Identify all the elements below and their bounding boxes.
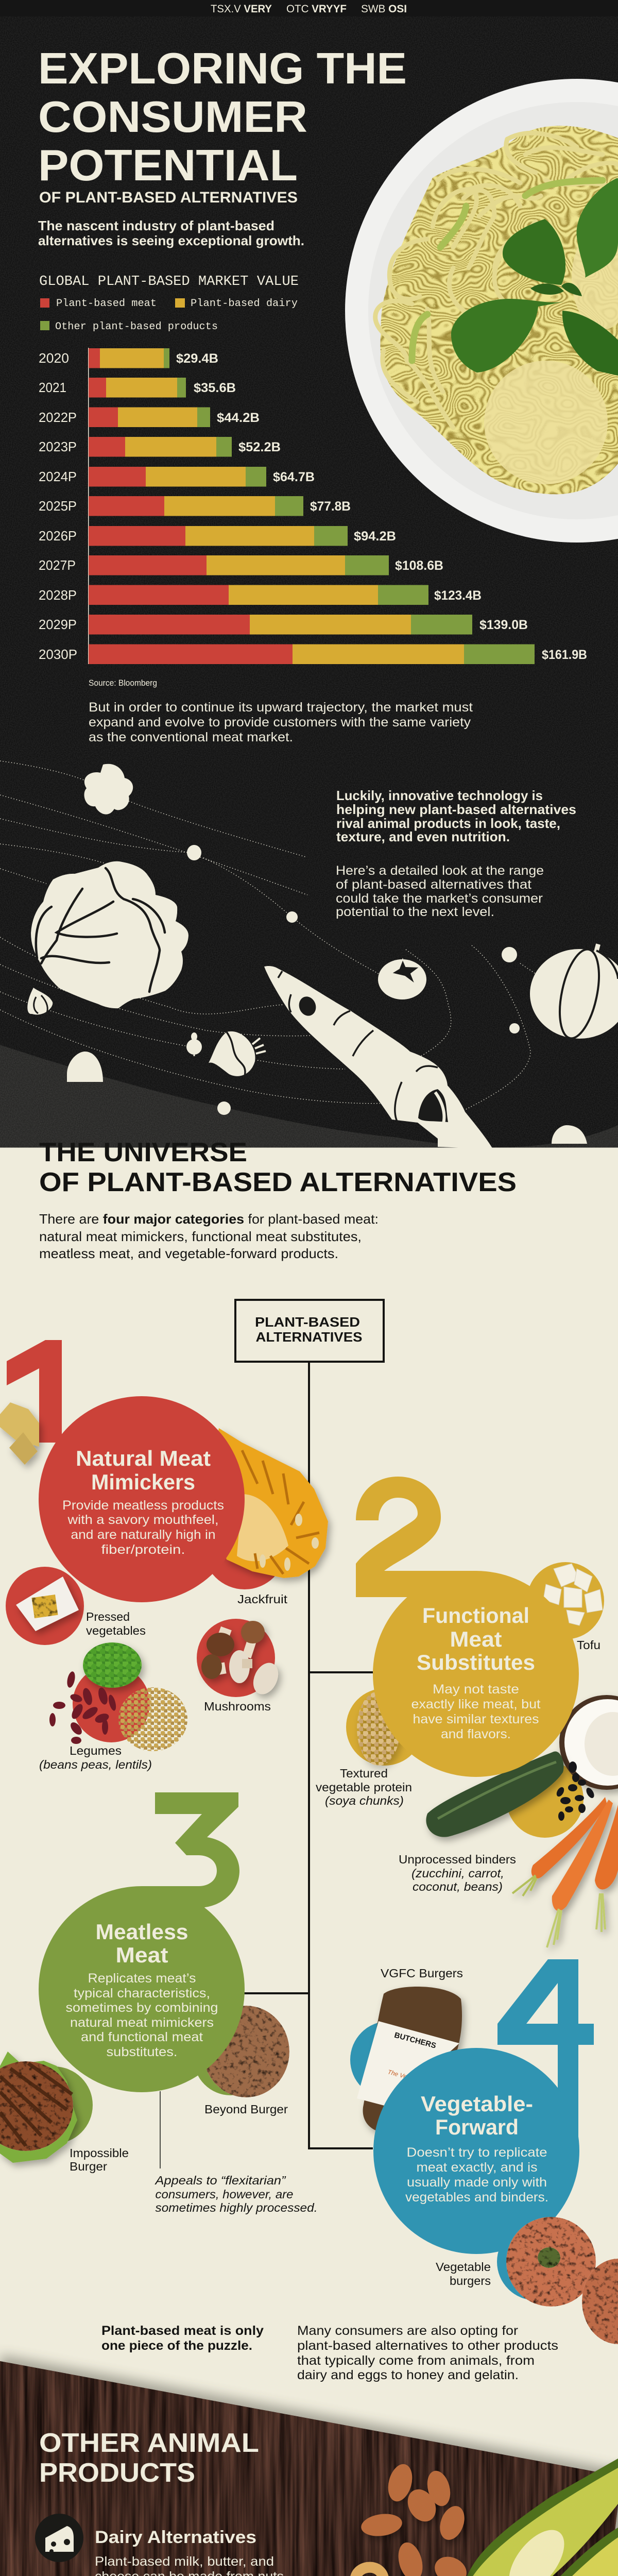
item label: beyond burger: Beyond Burger — [204, 2103, 288, 2116]
2023P bar: $52.2B — [238, 440, 281, 454]
item: pressed vegetables: vegetables — [86, 1624, 146, 1637]
noodles — [375, 133, 618, 428]
description: fiber/protein. — [101, 1543, 185, 1557]
title: Dairy Alternatives — [95, 2528, 256, 2547]
2022P bar: 2022P — [39, 410, 77, 425]
intro text: alternatives is seeing exceptional growth. — [38, 233, 304, 248]
2028P bar: 2028P — [39, 587, 77, 603]
labels — [316, 1638, 600, 1893]
2020 bar: 2020 — [39, 350, 69, 366]
paragraph: other products: dairy and eggs to honey and gelatin. — [297, 2368, 519, 2382]
main circle — [39, 1396, 245, 1602]
2029P bar: 2029P — [39, 617, 77, 632]
heading: Mimickers — [91, 1470, 195, 1494]
panel: natural meat mimickers — [0, 1340, 328, 1771]
chart legend: Plant-based meat — [56, 298, 157, 310]
2026P bar: $94.2B — [354, 529, 396, 544]
icon: carrot rocket — [264, 966, 493, 1149]
photo: coconut — [559, 1695, 618, 1790]
main circle — [373, 1571, 579, 1777]
board shadow — [0, 2355, 618, 2576]
item: pressed vegetables — [6, 1567, 146, 1645]
photo: cashews — [299, 2567, 438, 2576]
2030P bar: $161.9B — [542, 648, 587, 662]
subtitle: OF PLANT-BASED ALTERNATIVES — [39, 189, 298, 206]
description: exactly like meat, but — [411, 1697, 541, 1711]
section: dairy alternatives — [35, 2514, 284, 2576]
2023P bar — [39, 437, 281, 456]
heading: Meatless — [96, 1920, 188, 1944]
item: vgfc burgers pack — [350, 1987, 462, 2133]
heading — [96, 1920, 188, 1967]
chart source: Source: Bloomberg — [89, 678, 157, 688]
tree root: plant-based alternatives box — [235, 1300, 384, 1362]
photo: wooden cutting board — [0, 2354, 618, 2576]
heading: other animal products: PRODUCTS — [39, 2458, 195, 2488]
paragraph: one piece of the puzzle: Plant-based meat is only — [101, 2324, 264, 2338]
intro text — [38, 218, 304, 248]
ticker bar — [0, 0, 618, 16]
panel: vegetable-forward — [350, 1959, 618, 2344]
paragraph: detailed look: of plant-based alternatives that — [336, 877, 531, 892]
main circle — [373, 2048, 579, 2254]
basil leaves — [451, 178, 618, 376]
paragraph: innovative technology: helping new plant-based alternatives — [336, 802, 576, 817]
avocado half 2 — [519, 2528, 618, 2576]
description: usually made only with — [407, 2175, 547, 2190]
photo: black beans — [555, 1761, 596, 1821]
2027P bar: 2027P — [39, 557, 76, 573]
description — [411, 1682, 541, 1741]
paragraph: four major categories: There are four major categories for plant-based meat: — [39, 1211, 379, 1227]
paragraph: innovative technology — [336, 788, 576, 844]
item: vegetable burgers: burgers — [450, 2274, 491, 2287]
intro text: The nascent industry of plant-based — [38, 218, 274, 233]
chart legend: Plant-based dairy — [191, 298, 298, 310]
description: natural meat mimickers — [70, 2015, 214, 2030]
heading: the universe — [39, 1138, 517, 1197]
callout: flexitarian note: sometimes highly processed. — [156, 2201, 317, 2214]
item: legumes — [39, 1642, 187, 1771]
dotted orbit lines — [0, 761, 536, 1112]
description: vegetables and binders. — [405, 2190, 548, 2205]
heading: Natural Meat — [76, 1446, 211, 1470]
icon: garlic — [27, 988, 53, 1014]
item label: vgfc burgers: VGFC Burgers — [381, 1967, 463, 1980]
item: vegetable burgers: Vegetable — [436, 2260, 491, 2274]
2020 bar: $29.4B — [176, 351, 218, 366]
paragraph: upward trajectory — [89, 700, 473, 744]
item label: mushrooms: Mushrooms — [204, 1700, 271, 1713]
icon: pumpkin — [530, 943, 618, 1042]
paragraph: innovative technology: texture, and even nutrition. — [336, 829, 510, 844]
2029P bar: $139.0B — [479, 618, 528, 632]
heading — [421, 2092, 533, 2139]
paragraph: four major categories — [39, 1211, 379, 1261]
title: POTENTIAL — [38, 141, 298, 190]
description: with a savory mouthfeel, — [67, 1513, 218, 1527]
description: and flavors. — [441, 1727, 511, 1741]
photo: crackers — [0, 1402, 39, 1465]
2025P bar: $77.8B — [310, 499, 351, 514]
heading — [417, 1603, 535, 1674]
item: textured vegetable protein — [346, 1688, 423, 1766]
panel: dark slate space background — [0, 0, 618, 1147]
heading: the universe: THE UNIVERSE — [39, 1138, 247, 1167]
icon: tomato — [378, 959, 426, 999]
melted cheese — [484, 227, 618, 484]
number 4 — [497, 1959, 594, 2164]
heading: Meat — [115, 1943, 168, 1967]
ticker bar: OTC VRYYF — [286, 3, 347, 15]
paragraph: other products — [297, 2324, 558, 2382]
photo: zucchini — [426, 1751, 563, 1837]
paragraph: detailed look: potential to the next level. — [336, 905, 494, 919]
photo: avocados — [460, 2459, 618, 2576]
photo: carrots — [512, 1797, 618, 1947]
description — [405, 2145, 548, 2205]
paragraph: upward trajectory: as the conventional meat market. — [89, 730, 293, 744]
title: CONSUMER — [38, 93, 307, 142]
2025P bar: 2025P — [39, 498, 77, 514]
2023P bar: 2023P — [39, 439, 77, 454]
icon: cheese — [35, 2514, 83, 2562]
ticker bar: TSX.V VERY — [211, 3, 272, 15]
title: EXPLORING THE — [38, 44, 407, 93]
2025P bar — [39, 496, 351, 516]
tree connector lines — [242, 1362, 373, 2148]
photo: plate of pasta — [345, 79, 618, 543]
icon: cabbage — [31, 861, 188, 1008]
labels: (zucchini, carrot, — [411, 1867, 504, 1880]
paragraph: upward trajectory: expand and evolve to provide customers with the same variety — [89, 715, 471, 730]
planet surface: bumps on the horizon — [67, 1052, 587, 1144]
2021 bar: $35.6B — [194, 381, 236, 395]
heading: Substitutes — [417, 1650, 535, 1674]
item: vgfc burgers pack: BUTCHERS — [393, 2031, 437, 2050]
description: have similar textures — [413, 1712, 539, 1726]
item: vgfc burgers pack: The Very G — [387, 2068, 419, 2083]
2021 bar: 2021 — [39, 380, 66, 395]
description: meat exactly, and is — [416, 2160, 538, 2175]
item: impossible burger — [0, 2052, 129, 2173]
number 2 — [356, 1477, 476, 1597]
heading: Meat — [450, 1627, 502, 1651]
tree root: plant-based alternatives box: ALTERNATIVES — [255, 1329, 363, 1345]
heading — [76, 1446, 211, 1494]
labels: vegetable protein — [316, 1781, 412, 1794]
bar chart: global plant-based market value — [39, 348, 587, 664]
icon: turnip — [209, 1031, 266, 1077]
item: legumes: (beans peas, lentils) — [39, 1758, 152, 1771]
zucchini strands — [412, 180, 603, 361]
paragraph: four major categories: meatless meat, and vegetable-forward products. — [39, 1246, 338, 1261]
text — [95, 2554, 284, 2576]
2022P bar — [39, 407, 260, 427]
panel: functional meat substitutes — [316, 1477, 618, 1947]
item: impossible burger: Burger — [70, 2160, 107, 2173]
chart legend: Other plant-based products — [55, 321, 218, 333]
heading: Vegetable- — [421, 2092, 533, 2116]
paragraph: other products: plant-based alternatives to other products — [297, 2338, 558, 2353]
heading: the universe: OF PLANT-BASED ALTERNATIVES — [39, 1167, 517, 1197]
photo: jackfruit — [206, 1428, 328, 1578]
2024P bar: $64.7B — [273, 470, 315, 484]
labels: Unprocessed binders — [399, 1853, 516, 1866]
2030P bar: 2030P — [39, 647, 77, 662]
heading: Functional — [422, 1603, 529, 1628]
2024P bar — [39, 467, 315, 486]
item: vegetable burgers — [436, 2217, 618, 2344]
2028P bar: $123.4B — [434, 588, 482, 603]
text: Plant-based milk, butter, and — [95, 2554, 274, 2569]
description: Doesn’t try to replicate — [407, 2145, 547, 2160]
item: jackfruit label: Jackfruit — [237, 1592, 288, 1606]
main circle — [39, 1886, 245, 2092]
description: Replicates meat’s — [88, 1971, 196, 1986]
description: typical characteristics, — [74, 1986, 210, 2001]
labels: Textured — [340, 1767, 388, 1780]
2027P bar: $108.6B — [395, 558, 443, 573]
paragraph: detailed look — [336, 863, 544, 919]
description: and functional meat — [81, 2030, 203, 2044]
panel: meatless meat — [0, 1792, 317, 2214]
paragraph: other products: Many consumers are also opting for — [297, 2324, 518, 2338]
small red circle behind jackfruit — [203, 1507, 286, 1589]
item: pressed vegetables: Pressed — [86, 1610, 130, 1623]
paragraph: other products: that typically come from animals, from — [297, 2353, 535, 2368]
item: impossible burger: Impossible — [70, 2146, 129, 2160]
tree root: plant-based alternatives box: PLANT-BASED — [255, 1314, 360, 1330]
callout: flexitarian note: consumers, however, are — [156, 2188, 294, 2201]
icon: pea 3 — [502, 947, 517, 962]
description: May not taste — [433, 1682, 519, 1697]
title — [38, 44, 407, 190]
heading: Forward — [435, 2115, 519, 2139]
2030P bar — [39, 644, 587, 664]
item: mushrooms — [197, 1619, 283, 1698]
paragraph: innovative technology: Luckily, innovative technology is — [336, 788, 543, 803]
icon: pea 4 — [509, 1023, 520, 1033]
2020 bar — [39, 348, 218, 368]
item: beyond burger — [194, 2006, 289, 2097]
2029P bar — [39, 615, 528, 635]
callout: flexitarian note — [154, 2091, 317, 2214]
avocado half 1 — [460, 2459, 618, 2576]
item: yellow circle behind binders — [506, 1760, 583, 1838]
item: tofu — [527, 1562, 604, 1639]
description: sometimes by combining — [66, 2001, 218, 2015]
2028P bar — [39, 585, 482, 605]
paragraph: detailed look: could take the market’s consumer — [336, 891, 543, 906]
plate — [345, 79, 618, 543]
2021 bar — [39, 378, 236, 398]
paragraph: innovative technology: rival animal products in look, taste, — [336, 816, 560, 831]
item: legumes: Legumes — [70, 1744, 122, 1757]
number 3 — [142, 1792, 239, 1922]
chart heading: GLOBAL PLANT-BASED MARKET VALUE — [39, 274, 299, 290]
labels: (soya chunks) — [325, 1794, 404, 1807]
description: and are naturally high in — [71, 1528, 215, 1542]
description — [62, 1498, 224, 1557]
illustration: vegetable universe — [27, 764, 618, 1149]
description: substitutes. — [106, 2045, 177, 2059]
2024P bar: 2024P — [39, 469, 77, 484]
icon: broccoli — [84, 764, 133, 815]
callout: flexitarian note: Appeals to “flexitarian” — [154, 2174, 286, 2187]
description: Provide meatless products — [62, 1498, 224, 1513]
heading: other animal products: OTHER ANIMAL — [39, 2428, 259, 2458]
2022P bar: $44.2B — [217, 411, 260, 425]
paragraph: upward trajectory: But in order to continue its upward trajectory, the market must — [89, 700, 473, 715]
paragraph: detailed look: Here’s a detailed look at the range — [336, 863, 544, 878]
chart legend — [40, 298, 298, 333]
ticker bar: SWB OSI — [361, 3, 407, 15]
labels: coconut, beans) — [413, 1880, 503, 1893]
icon: pea 1 — [187, 845, 201, 860]
number 1 — [7, 1340, 62, 1443]
icon: pea 2 — [286, 911, 298, 923]
photo: almonds — [359, 2462, 471, 2576]
2026P bar: 2026P — [39, 528, 77, 544]
paragraph: one piece of the puzzle — [101, 2324, 264, 2353]
description — [66, 1971, 218, 2059]
heading: other animal products — [39, 2428, 259, 2488]
2027P bar — [39, 555, 443, 575]
2026P bar — [39, 526, 396, 546]
paragraph: four major categories: natural meat mimickers, functional meat substitutes, — [39, 1229, 362, 1244]
icon: radish — [186, 1032, 202, 1056]
labels: Tofu — [577, 1638, 600, 1652]
paragraph: one piece of the puzzle: one piece of the puzzle. — [101, 2338, 252, 2353]
